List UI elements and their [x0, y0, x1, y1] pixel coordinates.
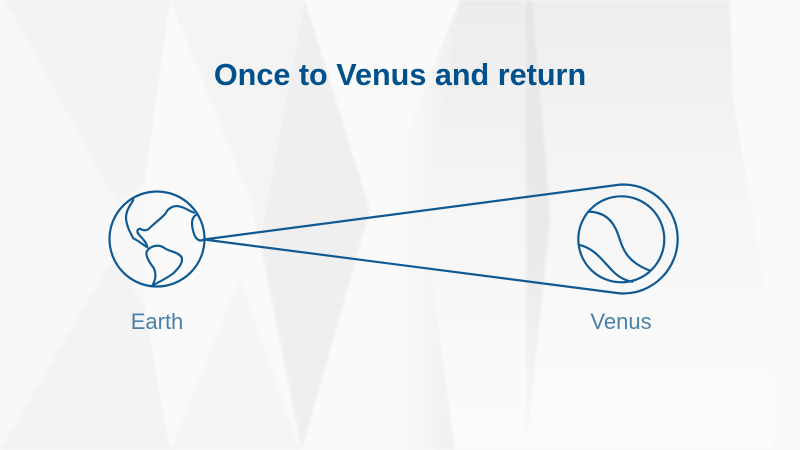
arrow: trajectory from Earth around Venus and back — [204, 184, 678, 294]
icon: Earth globe — [110, 192, 204, 286]
label: Venus: Venus — [590, 309, 652, 334]
title: Once to Venus and return — [214, 58, 586, 92]
icon: Venus planet — [578, 196, 664, 282]
label: Earth: Earth — [131, 309, 183, 334]
